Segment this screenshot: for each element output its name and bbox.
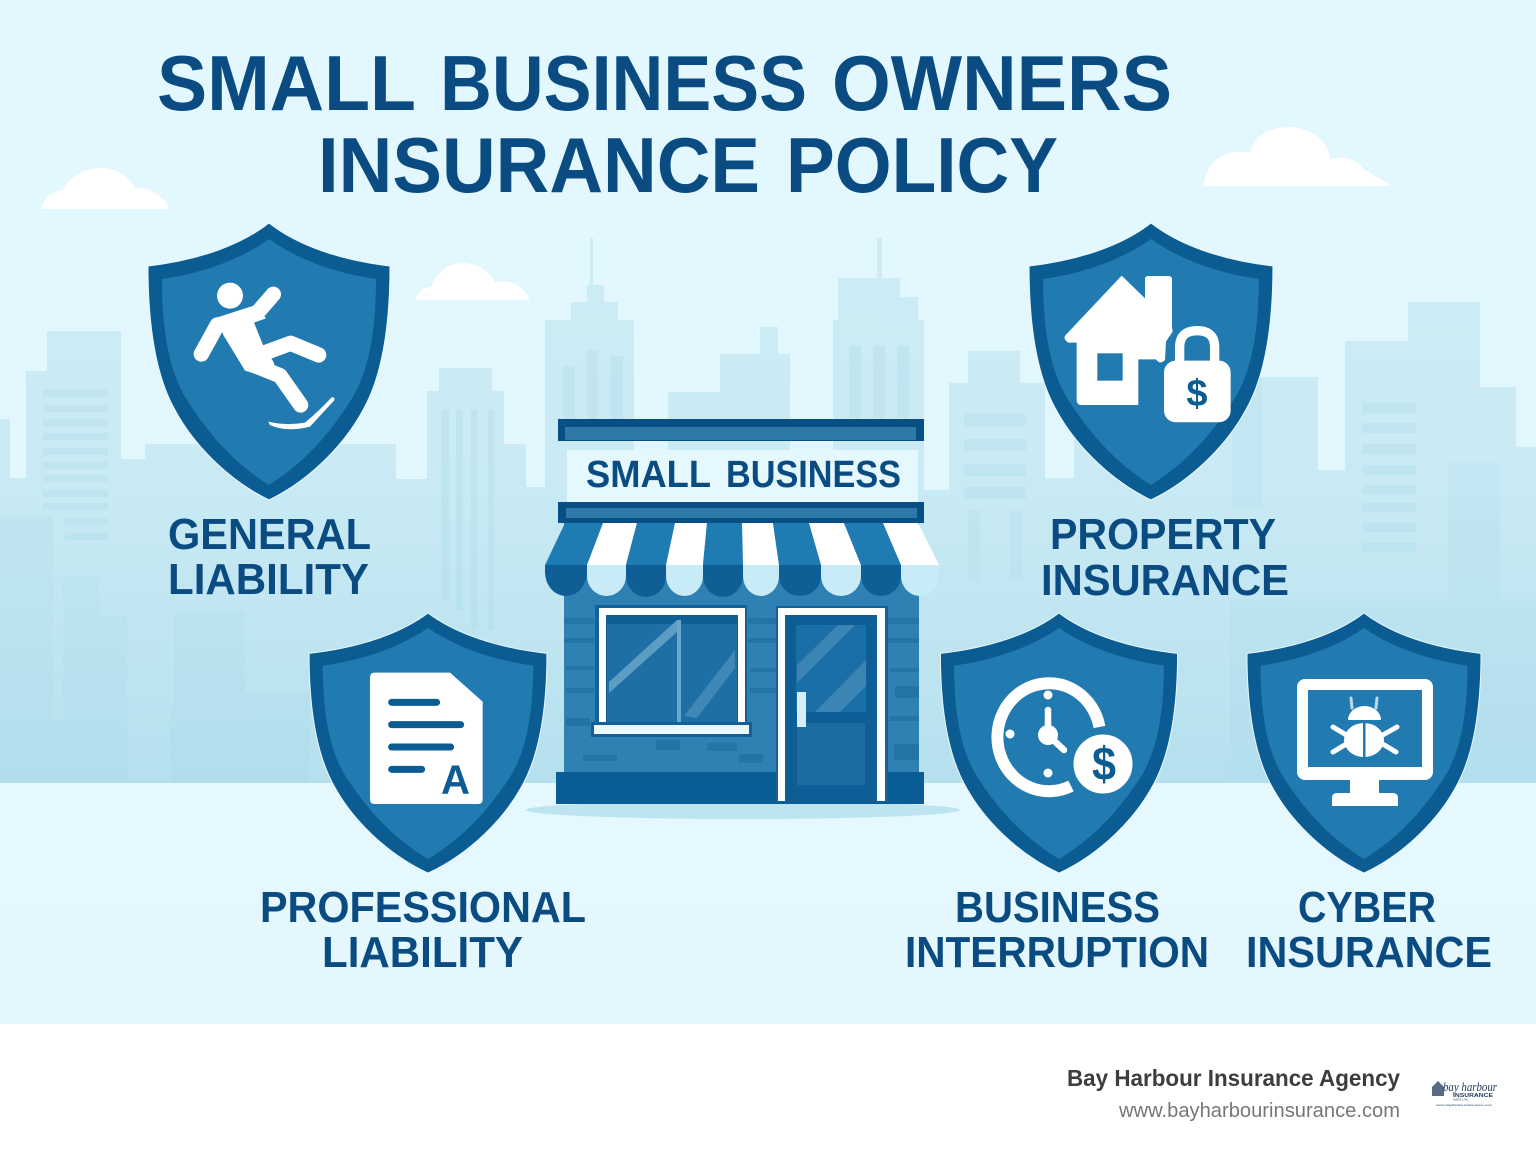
icon: document	[370, 673, 483, 804]
label: professional liability	[260, 883, 586, 977]
city skyline	[0, 238, 1536, 783]
shield: property insurance	[1029, 223, 1273, 500]
sign text	[586, 454, 901, 496]
icon: house and padlock	[1065, 276, 1231, 422]
shield: general liability	[148, 223, 390, 500]
label: general liability	[168, 510, 371, 604]
label: business interruption: INTERRUPTION	[905, 928, 1209, 977]
title: INSURANCE	[318, 121, 760, 209]
cloud left	[41, 168, 170, 209]
icon: person slipping	[201, 283, 334, 429]
sign text: BUSINESS	[726, 454, 901, 496]
awning	[545, 523, 939, 597]
footer url: www.bayharbourinsurance.com	[1118, 1100, 1400, 1122]
door	[776, 606, 888, 802]
footer agency name: Bay Harbour Insurance Agency	[1067, 1065, 1400, 1091]
label: property insurance: INSURANCE	[1041, 556, 1289, 605]
label: general liability: GENERAL	[168, 510, 371, 559]
agency logo: bay harbour	[1443, 1079, 1498, 1094]
sign text: SMALL	[586, 454, 711, 496]
lower fascia	[558, 502, 924, 523]
ground	[0, 783, 1536, 1024]
label: general liability: LIABILITY	[168, 555, 369, 604]
label: professional liability: PROFESSIONAL	[260, 883, 586, 932]
top fascia	[558, 419, 924, 441]
label: cyber insurance: CYBER	[1298, 883, 1436, 932]
base	[556, 772, 924, 804]
title: SMALL	[157, 39, 416, 127]
cloud right	[1203, 127, 1392, 186]
icon: clock and coin	[997, 683, 1134, 795]
label: property insurance: PROPERTY	[1050, 510, 1276, 559]
label: cyber insurance	[1246, 883, 1492, 977]
sign board	[567, 450, 918, 502]
shield: cyber insurance	[1247, 613, 1481, 873]
icon: document: A	[441, 756, 470, 802]
cloud middle	[416, 263, 530, 300]
label: business interruption: BUSINESS	[955, 883, 1160, 932]
agency logo: www.bayharbourinsurance.com	[1436, 1103, 1493, 1107]
title: OWNERS	[832, 39, 1172, 127]
title: POLICY	[786, 121, 1058, 209]
window	[591, 605, 752, 737]
footer band	[0, 1024, 1536, 1154]
agency logo: AGENCY, INC.	[1453, 1098, 1469, 1102]
label: professional liability: LIABILITY	[322, 928, 523, 977]
title	[157, 39, 1172, 209]
title: BUSINESS	[440, 39, 807, 127]
label: cyber insurance: INSURANCE	[1246, 928, 1492, 977]
wall with bricks	[564, 523, 919, 773]
label: business interruption	[905, 883, 1209, 977]
shield: professional liability	[309, 613, 547, 873]
icon: monitor with bug	[1297, 679, 1433, 806]
ground shadow	[526, 801, 960, 819]
storefront	[526, 419, 960, 819]
label: property insurance	[1041, 510, 1289, 605]
agency logo	[1432, 1079, 1498, 1107]
icon: house and padlock: $	[1186, 373, 1208, 415]
shield: business interruption	[940, 613, 1178, 873]
icon: clock and coin: $	[1092, 737, 1116, 790]
agency logo: INSURANCE	[1453, 1093, 1493, 1099]
